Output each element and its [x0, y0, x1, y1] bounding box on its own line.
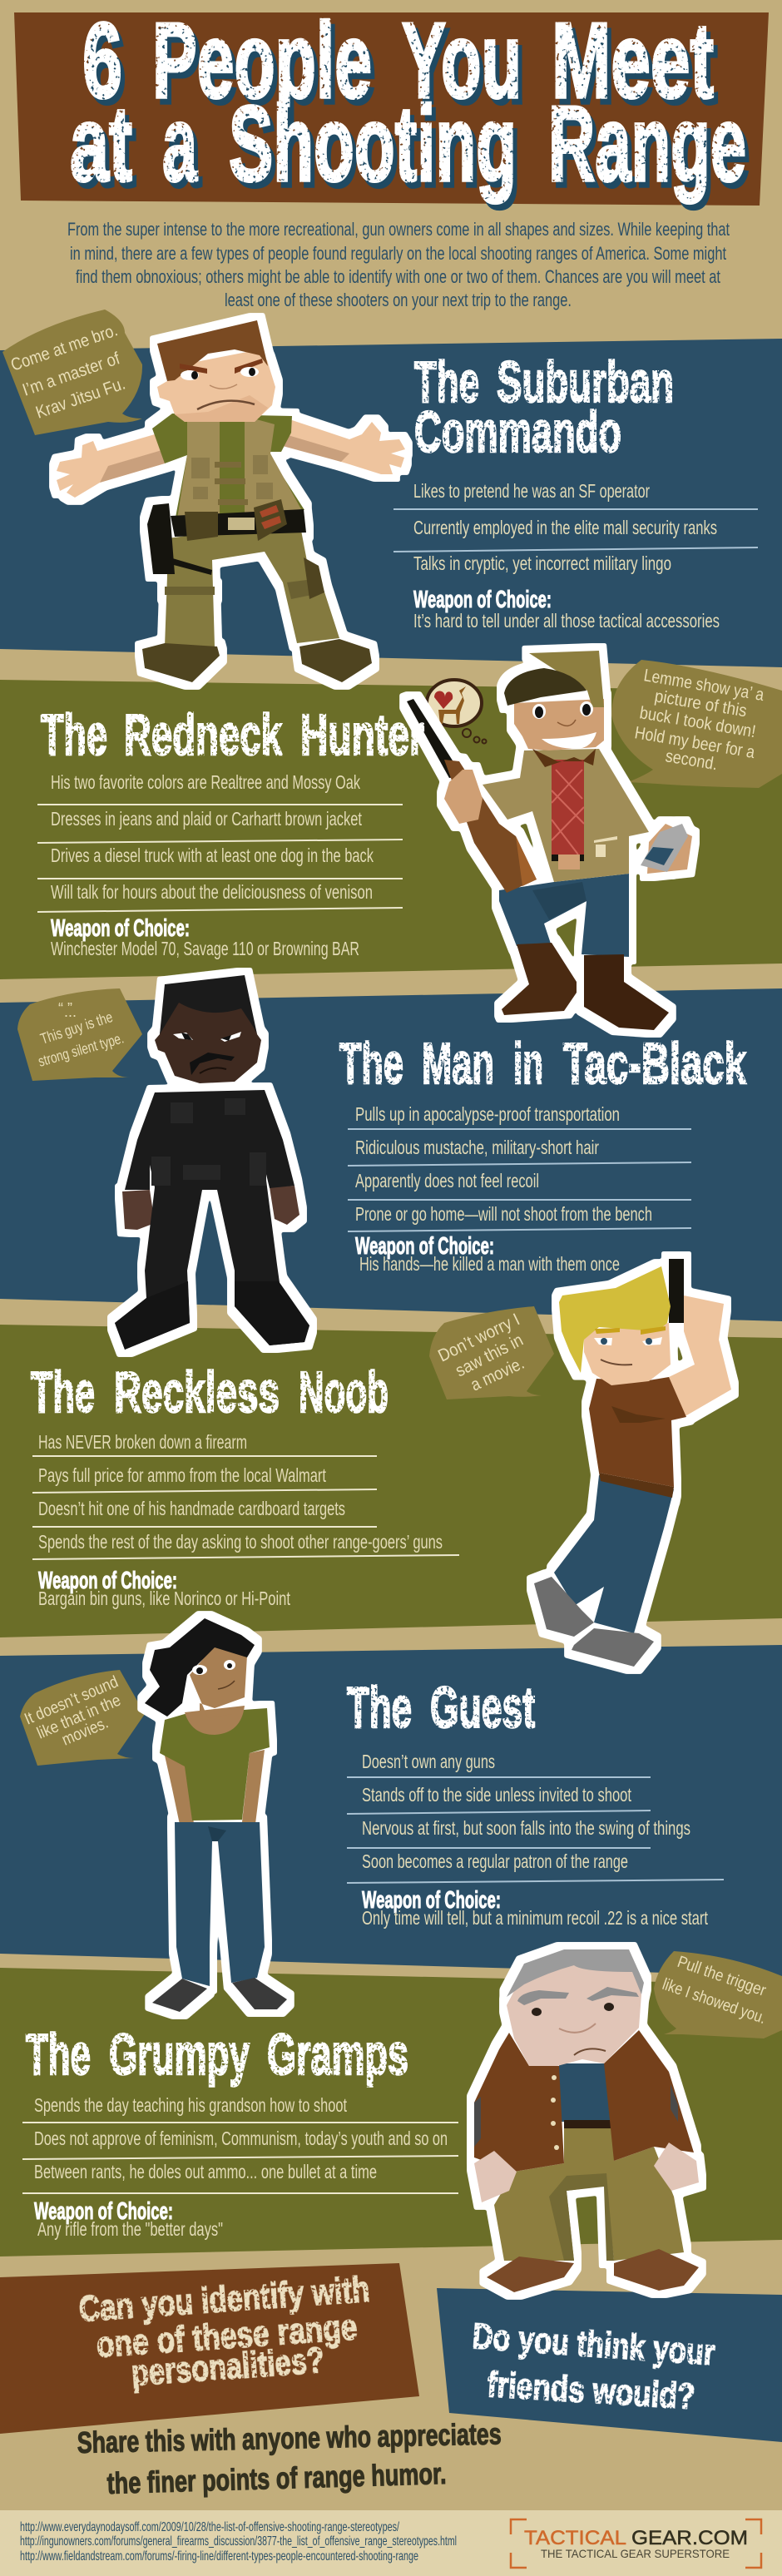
title line 2: Shooting	[229, 84, 517, 204]
speech bubble: ...	[64, 1003, 77, 1020]
speech bubble: I’m a master of	[20, 349, 122, 400]
speech bubble: Pull the trigger	[675, 1953, 769, 2000]
trait list: Spends the day teaching his grandson how to shoot	[34, 2094, 347, 2116]
speech bubble: It doesn’t sound	[22, 1672, 121, 1729]
trait list: Has NEVER broken down a firearm	[38, 1431, 247, 1453]
trait list: Ridiculous mustache, military-short hair	[355, 1137, 599, 1158]
heading: The	[347, 1675, 412, 1740]
character: reckless noob	[534, 1259, 731, 1667]
heading: Grumpy	[109, 2022, 250, 2087]
heading	[347, 1675, 535, 1740]
logo: tacticalgear.com: THE TACTICAL GEAR SUPERSTORE	[541, 2547, 730, 2560]
speech bubble: “ ”	[58, 1000, 72, 1017]
share message	[77, 2416, 502, 2500]
speech bubble: Come at me bro.	[8, 320, 120, 375]
weapon of choice: Winchester Model 70, Savage 110 or Browning BAR	[51, 938, 359, 959]
trait list	[22, 2094, 458, 2193]
weapon of choice: Weapon of Choice:	[355, 1233, 494, 1260]
speech bubble: buck I took down!	[638, 703, 757, 741]
speech bubble: movies.	[59, 1714, 111, 1750]
title line 1: People	[152, 1, 372, 121]
title line 2: a	[162, 84, 198, 204]
share message: Share this with anyone who appreciates	[77, 2416, 502, 2460]
heading: The	[339, 1031, 403, 1096]
trait list: Will talk for hours about the deliciousness of venison	[51, 881, 373, 903]
title line 2	[70, 84, 746, 204]
logo: tacticalgear.com: GEAR.COM	[631, 2527, 748, 2549]
weapon of choice: Weapon of Choice:	[38, 1568, 177, 1594]
source links: http://ingunowners.com/forums/general_firearms_discussion/3877-the_list_of_offensive_range_stereotypes.html	[20, 2534, 457, 2549]
callout: can you identify	[0, 2263, 419, 2434]
weapon of choice: Bargain bin guns, like Norinco or Hi-Point	[38, 1588, 290, 1609]
band: man in tac-black	[0, 988, 782, 1321]
trait list	[37, 771, 403, 912]
speech bubble: saw this in	[453, 1330, 527, 1380]
weapon of choice: His hands—he killed a man with them once	[359, 1253, 620, 1275]
heading: in	[513, 1031, 543, 1096]
weapon of choice	[355, 1233, 620, 1275]
callout: can you identify: Can you identify with	[77, 2269, 371, 2330]
band: suburban commando	[0, 339, 782, 667]
speech bubble	[20, 1670, 145, 1766]
callout: can you identify: one of these range	[95, 2306, 359, 2365]
trait list: Prone or go home—will not shoot from the bench	[355, 1203, 652, 1225]
trait list: Drives a diesel truck with at least one dog in the back	[51, 845, 374, 866]
heading	[26, 2022, 408, 2087]
panel: the suburban commando	[2, 310, 758, 682]
logo: tacticalgear.com	[511, 2519, 761, 2568]
weapon of choice: Weapon of Choice:	[413, 587, 552, 613]
intro paragraph	[67, 219, 730, 310]
trait list	[348, 1103, 691, 1231]
speech bubble	[654, 1951, 782, 2039]
trait list	[347, 1751, 724, 1883]
heading: The	[31, 1360, 95, 1424]
band: the guest	[0, 1645, 782, 1976]
trait list: Does not approve of feminism, Communism, today’s youth and so on	[34, 2128, 448, 2149]
heading: Suburban	[497, 349, 674, 414]
heading: Gramps	[267, 2022, 408, 2087]
heading: Commando	[414, 399, 621, 464]
band: reckless noob	[0, 1325, 782, 1637]
trait list: Dresses in jeans and plaid or Carhartt brown jacket	[51, 808, 362, 830]
speech bubble: a movie.	[468, 1354, 527, 1395]
panel: the man in tac-black	[17, 975, 746, 1350]
trait list: Likes to pretend he was an SF operator	[413, 480, 650, 502]
trait list	[393, 480, 758, 574]
speech bubble	[2, 310, 142, 435]
speech bubble	[17, 988, 142, 1081]
heading: Noob	[299, 1360, 389, 1424]
trait list: Doesn’t hit one of his handmade cardboard targets	[38, 1498, 345, 1519]
logo: tacticalgear.com: TACTICAL	[524, 2527, 626, 2549]
weapon of choice: Weapon of Choice:	[51, 915, 190, 942]
heading: Reckless	[114, 1360, 280, 1424]
panel: the guest	[20, 1618, 724, 2012]
heading: Hunter	[300, 702, 424, 767]
heading	[41, 702, 424, 767]
character: redneck hunter	[407, 651, 692, 1030]
character: grumpy gramps	[474, 1949, 699, 2292]
band: redneck hunter	[0, 680, 782, 979]
trait list: Spends the rest of the day asking to shoot other range-goers’ guns	[38, 1531, 443, 1553]
source links: http://www.fieldandstream.com/forums/-firing-line/different-types-people-encountered-shooting-range	[20, 2549, 418, 2564]
weapon of choice: Weapon of Choice:	[34, 2198, 173, 2225]
speech bubble: second.	[664, 746, 719, 774]
heading: Man	[422, 1031, 494, 1096]
heading: The	[26, 2022, 91, 2087]
callout: do you think: friends would?	[486, 2364, 696, 2417]
trait list: Apparently does not feel recoil	[355, 1170, 539, 1191]
character: man in tac-black	[115, 975, 309, 1350]
source links: http://www.everydaynodaysoff.com/2009/10/28/the-list-of-offensive-shooting-range-stereotypes/	[20, 2520, 399, 2534]
footer band	[0, 2510, 782, 2576]
trait list: Doesn’t own any guns	[362, 1751, 495, 1772]
trait list: Pulls up in apocalypse-proof transportation	[355, 1103, 620, 1125]
speech bubble: Don’t worry I	[435, 1310, 522, 1365]
trait list: Between rants, he doles out ammo... one bullet at a time	[34, 2161, 377, 2182]
speech bubble: strong silent type.	[37, 1029, 126, 1070]
weapon of choice	[51, 915, 359, 959]
title banner	[14, 1, 769, 206]
speech bubble: Hold my beer for a	[633, 723, 756, 762]
weapon of choice: Any rifle from the "better days"	[37, 2218, 223, 2240]
speech bubble	[429, 1306, 554, 1399]
panel: the grumpy gramps	[22, 1951, 782, 2240]
thought bubble: deer	[427, 680, 486, 744]
trait list	[32, 1431, 459, 1559]
title line 1: You	[402, 1, 522, 121]
heading: The	[414, 349, 479, 414]
heading	[414, 349, 674, 464]
band: grumpy gramps	[0, 1968, 782, 2256]
intro paragraph: least one of these shooters on your next trip to the range.	[225, 290, 572, 310]
weapon of choice: Weapon of Choice:	[362, 1887, 501, 1914]
trait list: Soon becomes a regular patron of the range	[362, 1850, 628, 1872]
heading: Guest	[430, 1675, 535, 1740]
weapon of choice	[413, 587, 720, 632]
speech bubble: This guy is the	[38, 1008, 115, 1048]
panel: the reckless noob	[31, 1259, 731, 1667]
character: the guest	[145, 1618, 287, 2012]
trait list: His two favorite colors are Realtree and Mossy Oak	[51, 771, 360, 793]
callout: do you think	[437, 2288, 782, 2442]
speech bubble: Krav Jitsu Fu.	[33, 374, 128, 423]
source links	[20, 2520, 457, 2564]
heading	[339, 1031, 746, 1096]
trait list: Talks in cryptic, yet incorrect military lingo	[413, 552, 671, 574]
title line 1	[82, 1, 714, 121]
title line 2: at	[70, 84, 132, 204]
speech bubble: like that in the	[34, 1692, 123, 1743]
heading: Redneck	[124, 702, 282, 767]
callout: do you think: Do you think your	[471, 2316, 716, 2373]
character: commando	[57, 320, 405, 682]
heading: The	[41, 702, 107, 767]
callout: can you identify: personalities?	[130, 2340, 325, 2394]
trait list: Stands off to the side unless invited to shoot	[362, 1784, 631, 1806]
speech bubble	[611, 660, 782, 788]
share message: the finer points of range humor.	[106, 2456, 447, 2500]
trait list: Pays full price for ammo from the local Walmart	[38, 1464, 326, 1486]
panel: the redneck hunter	[37, 651, 782, 1030]
speech bubble: picture of this	[653, 686, 748, 721]
weapon of choice	[362, 1887, 708, 1929]
weapon of choice	[38, 1568, 290, 1609]
weapon of choice	[34, 2198, 223, 2240]
title line 1: 6	[82, 1, 122, 121]
